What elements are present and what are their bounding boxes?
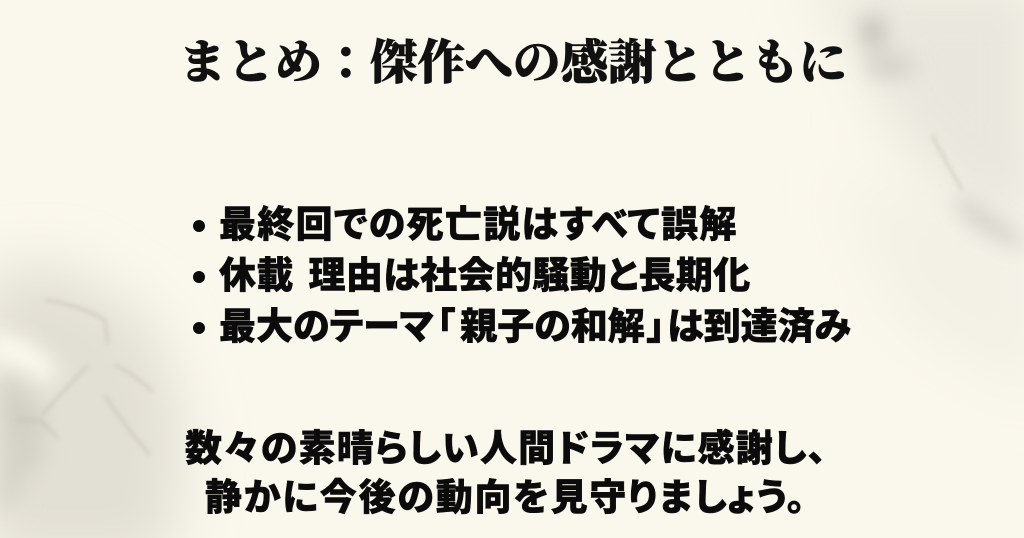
closing message	[185, 428, 827, 518]
bullet list	[193, 204, 851, 347]
title: まとめ：傑作への感謝とともに	[179, 37, 847, 90]
bullet 2: 休載 理由は社会的騒動と長期化	[219, 255, 751, 296]
closing line 1: 数々の素晴らしい人間ドラマに感謝し、	[185, 428, 827, 469]
closing line 2: 静かに今後の動向を見守りましょう。	[205, 477, 807, 518]
bullet 1: 最終回での死亡説はすべて誤解	[219, 204, 738, 245]
bullet 3: 最大のテーマ「親子の和解」は到達済み	[219, 306, 851, 347]
